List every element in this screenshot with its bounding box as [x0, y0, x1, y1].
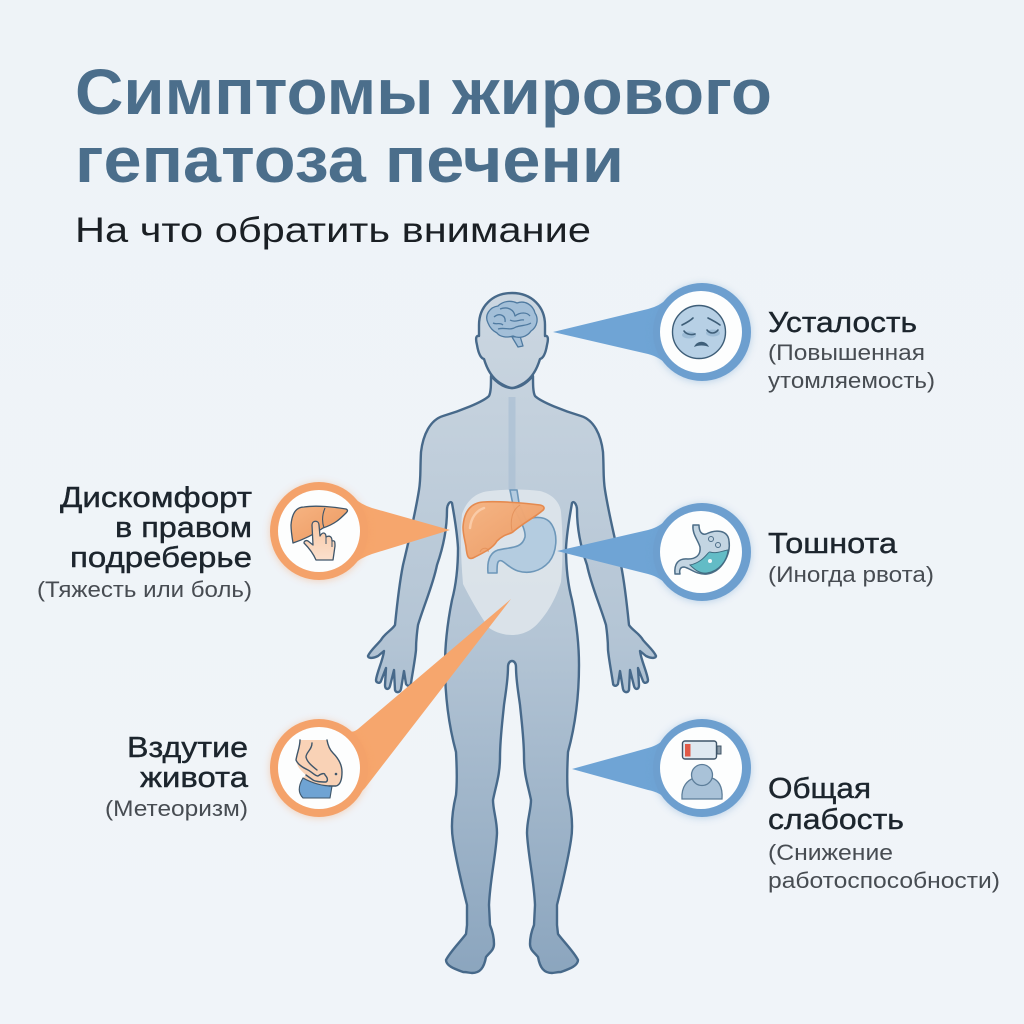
esophagus: [508, 397, 516, 490]
title: гепатоза печени: [75, 124, 624, 196]
label: bloating: [105, 732, 249, 821]
badge: [653, 720, 751, 818]
label: right hypochondrium discomfort: подреберье: [70, 542, 252, 574]
label: nausea: (Иногда рвота): [768, 562, 934, 587]
icon: stomach with fluid: [675, 525, 729, 574]
label: nausea: Тошнота: [768, 528, 898, 560]
abdomen highlight: [461, 490, 562, 635]
badge: [653, 284, 751, 382]
wedge: [353, 497, 450, 565]
pointer: weakness: [572, 719, 751, 818]
wedge: [349, 599, 511, 795]
brain: [487, 301, 537, 347]
label: bloating: живота: [140, 762, 249, 794]
icon: liver with pointing hand: [291, 506, 348, 560]
label: weakness: (Снижение: [768, 840, 893, 865]
label: fatigue: [768, 307, 935, 393]
stomach: [488, 490, 556, 573]
body silhouette: [368, 376, 656, 973]
wedge: [572, 735, 668, 801]
subtitle: На что обратить внимание: [75, 211, 591, 250]
label: weakness: работоспособности): [768, 868, 1000, 893]
label: weakness: Общая: [768, 773, 871, 805]
label: right hypochondrium discomfort: Дискомфорт: [60, 482, 252, 514]
pointer: bloating: [270, 599, 511, 818]
badge: [653, 504, 751, 602]
icon: bloated belly: [296, 740, 342, 798]
pointer: fatigue: [553, 283, 751, 382]
pointer: right hypochondrium discomfort: [270, 482, 450, 581]
label: right hypochondrium discomfort: (Тяжесть или боль): [37, 577, 252, 602]
badge: [270, 720, 368, 818]
wedge: [557, 518, 668, 586]
title: [75, 56, 772, 196]
label: weakness: [768, 773, 1000, 893]
label: fatigue: (Повышенная: [768, 340, 925, 365]
label: bloating: (Метеоризм): [105, 796, 248, 821]
label: right hypochondrium discomfort: [37, 482, 252, 602]
liver: [463, 502, 544, 559]
badge: [270, 483, 368, 581]
wedge: [553, 298, 668, 366]
label: bloating: Вздутие: [127, 732, 248, 764]
label: right hypochondrium discomfort: в правом: [115, 512, 252, 544]
label: nausea: [768, 528, 934, 587]
icon: tired face: [672, 306, 726, 358]
human body figure: [368, 293, 656, 973]
label: fatigue: утомляемость): [768, 368, 935, 393]
title: Симптомы жирового: [75, 56, 772, 128]
pointer: nausea: [557, 503, 751, 602]
label: weakness: слабость: [768, 804, 904, 836]
icon: low battery and person: [682, 741, 722, 799]
label: fatigue: Усталость: [768, 307, 917, 339]
